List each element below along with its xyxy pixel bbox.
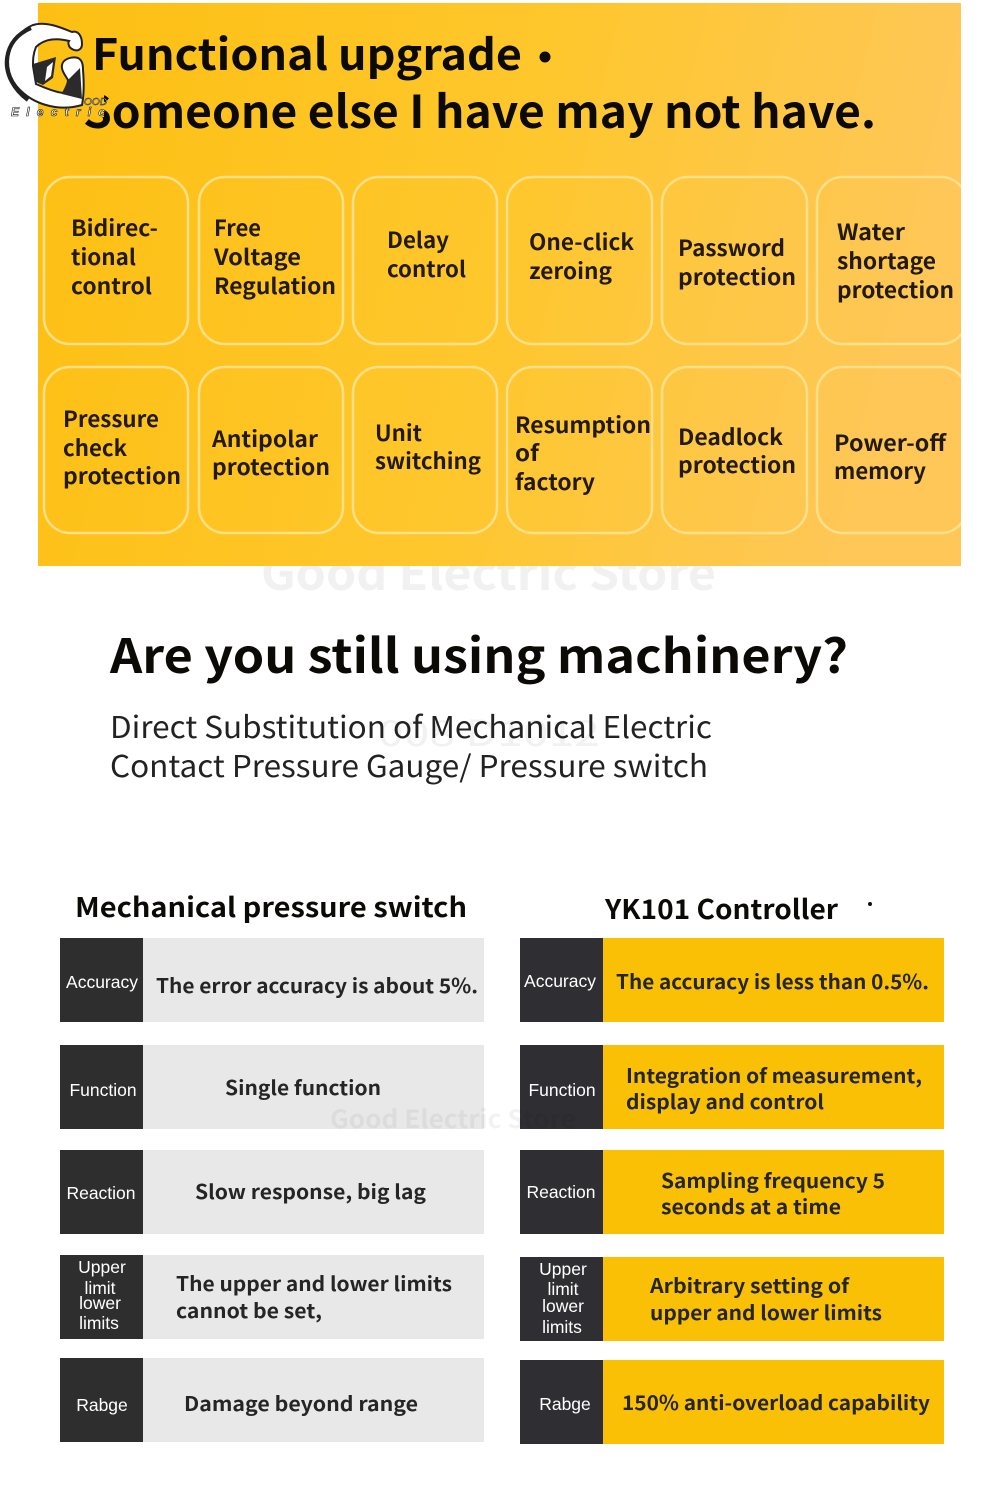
row: function: display and control — [626, 1086, 824, 1115]
logo text: Electric — [11, 105, 105, 119]
feature: power-off memory: memory — [834, 454, 926, 486]
row: reaction — [520, 1150, 944, 1234]
feature: water shortage protection: Water — [837, 215, 905, 247]
row: accuracy — [520, 938, 944, 1022]
feature: antipolar protection: protection — [212, 450, 330, 482]
feature: delay control: control — [387, 252, 466, 284]
row: function — [520, 1045, 944, 1129]
row: reaction: seconds at a time — [661, 1191, 841, 1220]
feature: antipolar protection: Antipolar — [211, 422, 318, 454]
feature: resumption of factory: of — [515, 436, 540, 468]
row: function: Function — [528, 1080, 596, 1100]
feature: password protection: protection — [678, 260, 796, 292]
watermark: faint number: 008 D1012 — [378, 705, 600, 757]
feature: pressure check protection — [44, 367, 188, 533]
feature: unit switching: switching — [375, 444, 481, 476]
feature: bidirectional control — [44, 177, 188, 344]
panel: mechanical pressure switch column — [60, 886, 484, 1442]
feature: bidirectional control: Bidirec- — [71, 211, 158, 243]
panel: functional upgrade — [38, 3, 967, 566]
row: function: Integration of measurement, — [626, 1060, 922, 1089]
row: accuracy: The accuracy is less than 0.5%. — [616, 966, 929, 995]
subheading text — [110, 703, 712, 786]
logo text — [11, 97, 107, 119]
row: limits — [520, 1257, 944, 1341]
feature: unit switching — [353, 367, 497, 533]
row: range — [520, 1360, 944, 1444]
logo text: OOD — [84, 97, 107, 108]
feature: one-click zeroing: One-click — [529, 225, 635, 257]
feature: pressure check protection: protection — [63, 459, 181, 491]
subheading text: Contact Pressure Gauge/ Pressure switch — [110, 742, 708, 786]
feature grid — [44, 177, 967, 533]
feature: resumption of factory: factory — [515, 465, 595, 497]
feature: pressure check protection: Pressure — [63, 402, 159, 434]
row: range — [60, 1358, 484, 1442]
feature: free voltage regulation: Voltage — [213, 240, 301, 272]
feature: resumption of factory: Resumption — [515, 408, 651, 440]
row: limits: limit — [84, 1278, 116, 1298]
row: accuracy: The error accuracy is about 5%. — [156, 970, 478, 999]
watermark: store name: Good Electric Store — [261, 538, 716, 604]
column heading: Mechanical pressure switch — [75, 886, 467, 925]
feature: water shortage protection — [817, 177, 967, 344]
feature: deadlock protection: Deadlock — [678, 420, 784, 452]
feature: one-click zeroing — [507, 177, 652, 344]
feature: power-off memory: Power-off — [834, 426, 947, 458]
row: limits: The upper and lower limits — [176, 1268, 452, 1297]
row: reaction: Reaction — [66, 1183, 136, 1203]
row: limits: Upper — [78, 1257, 126, 1277]
row: function: Function — [69, 1080, 137, 1100]
row: reaction: Reaction — [526, 1182, 596, 1202]
row: reaction: Sampling frequency 5 — [661, 1165, 885, 1194]
feature: password protection: Password — [678, 231, 785, 263]
row: accuracy: Accuracy — [66, 972, 138, 992]
feature: unit switching: Unit — [375, 416, 422, 448]
row: limits: Upper — [539, 1259, 587, 1279]
row: limits: lower — [79, 1293, 121, 1313]
feature: free voltage regulation: Regulation — [214, 269, 336, 301]
row: function: Single function — [225, 1072, 381, 1101]
feature: delay control: Delay — [387, 223, 449, 255]
logo: muscle G — [7, 24, 107, 119]
column heading: YK101 Controller — [604, 888, 838, 927]
subheading text: Direct Substitution of Mechanical Electric — [110, 703, 712, 747]
feature: water shortage protection: shortage — [837, 244, 936, 276]
row: accuracy — [60, 938, 484, 1022]
row: function — [60, 1045, 484, 1129]
row: range: Damage beyond range — [184, 1388, 418, 1417]
panel: YK101 controller column — [520, 888, 944, 1444]
row: limits: lower — [542, 1296, 584, 1316]
feature: resumption of factory — [507, 367, 652, 533]
watermark: store name over table: Good Electric Store — [330, 1100, 576, 1136]
feature: deadlock protection — [662, 367, 807, 533]
feature: free voltage regulation: Free — [214, 211, 261, 243]
feature: antipolar protection — [199, 367, 343, 533]
feature: delay control — [353, 177, 497, 344]
row: reaction — [60, 1150, 484, 1234]
feature: password protection — [662, 177, 807, 344]
feature: power-off memory — [817, 367, 967, 533]
row: limits: limits — [79, 1313, 119, 1333]
feature: bidirectional control: control — [71, 269, 152, 301]
feature: one-click zeroing: zeroing — [529, 254, 612, 286]
heading: functional upgrade: Functional upgrade — [92, 21, 522, 83]
row: limits: limit — [547, 1279, 579, 1299]
row: limits — [60, 1255, 484, 1339]
row: accuracy: Accuracy — [524, 971, 596, 991]
heading: functional upgrade — [83, 21, 876, 141]
row: limits: limits — [542, 1317, 582, 1337]
row: limits: cannot be set, — [176, 1295, 322, 1324]
row: range: Rabge — [539, 1394, 591, 1414]
row: limits: Arbitrary setting of — [649, 1270, 851, 1299]
heading: functional upgrade: Someone else I have may not have. — [83, 76, 876, 141]
row: range: Rabge — [76, 1395, 128, 1415]
row: reaction: Slow response, big lag — [195, 1176, 426, 1205]
feature: pressure check protection: check — [63, 431, 128, 463]
feature: deadlock protection: protection — [678, 448, 796, 480]
feature: water shortage protection: protection — [837, 273, 954, 305]
feature: free voltage regulation — [199, 177, 343, 344]
row: range: 150% anti-overload capability — [622, 1387, 931, 1416]
heading: are you still using machinery: Are you still using machinery? — [109, 618, 848, 687]
feature: bidirectional control: tional — [71, 240, 136, 272]
row: limits: upper and lower limits — [650, 1297, 882, 1326]
